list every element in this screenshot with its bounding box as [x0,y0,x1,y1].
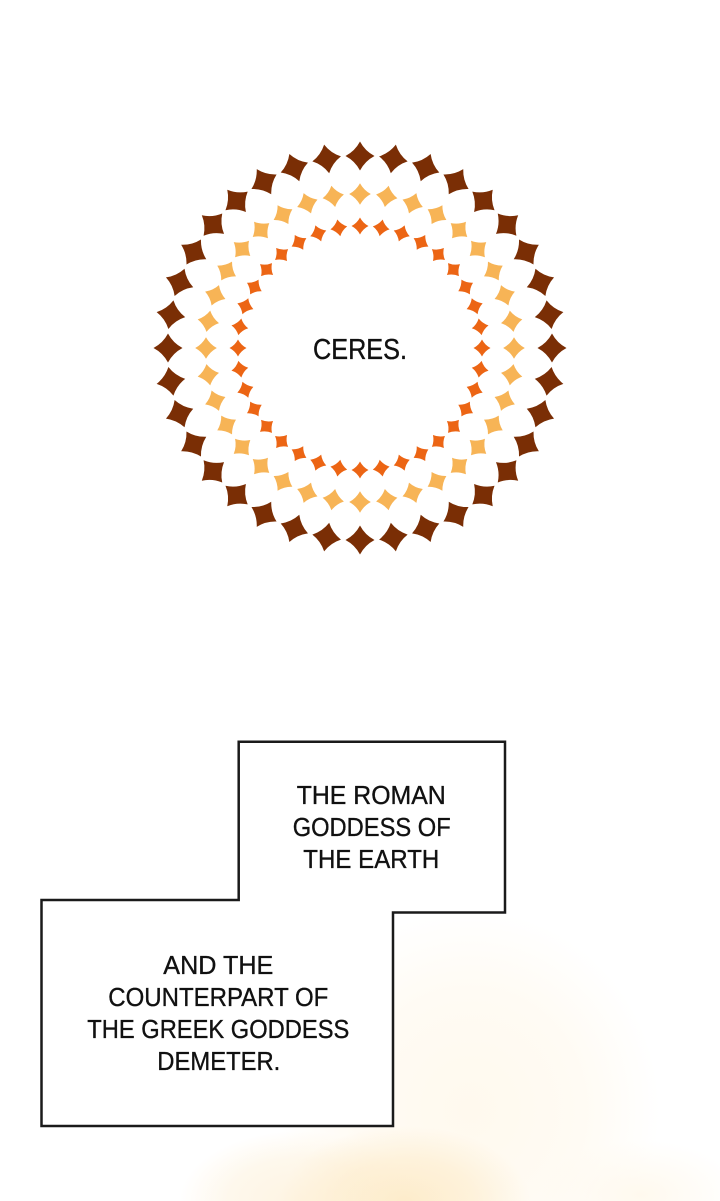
caption: Greek counterpart: DEMETER. [157,1046,280,1076]
stepped caption box [42,742,505,1126]
narration panel [42,742,505,1126]
caption: Roman goddess: THE ROMAN [297,780,446,810]
inner ring of orange stars [230,218,490,478]
outer ring of dark brown stars [154,142,566,554]
caption: Greek counterpart: AND THE [163,950,273,980]
caption: Greek counterpart [87,950,349,1076]
caption: Greek counterpart: THE GREEK GODDESS [87,1014,349,1044]
caption: Roman goddess: THE EARTH [303,844,439,874]
star ring emblem [154,142,566,554]
caption: Roman goddess [293,780,451,874]
heading: Ceres: CERES. [313,334,407,366]
middle ring of golden stars [195,183,525,513]
caption: Greek counterpart: COUNTERPART OF [108,982,328,1012]
caption: Roman goddess: GODDESS OF [293,812,451,842]
background glow [0,900,720,1201]
